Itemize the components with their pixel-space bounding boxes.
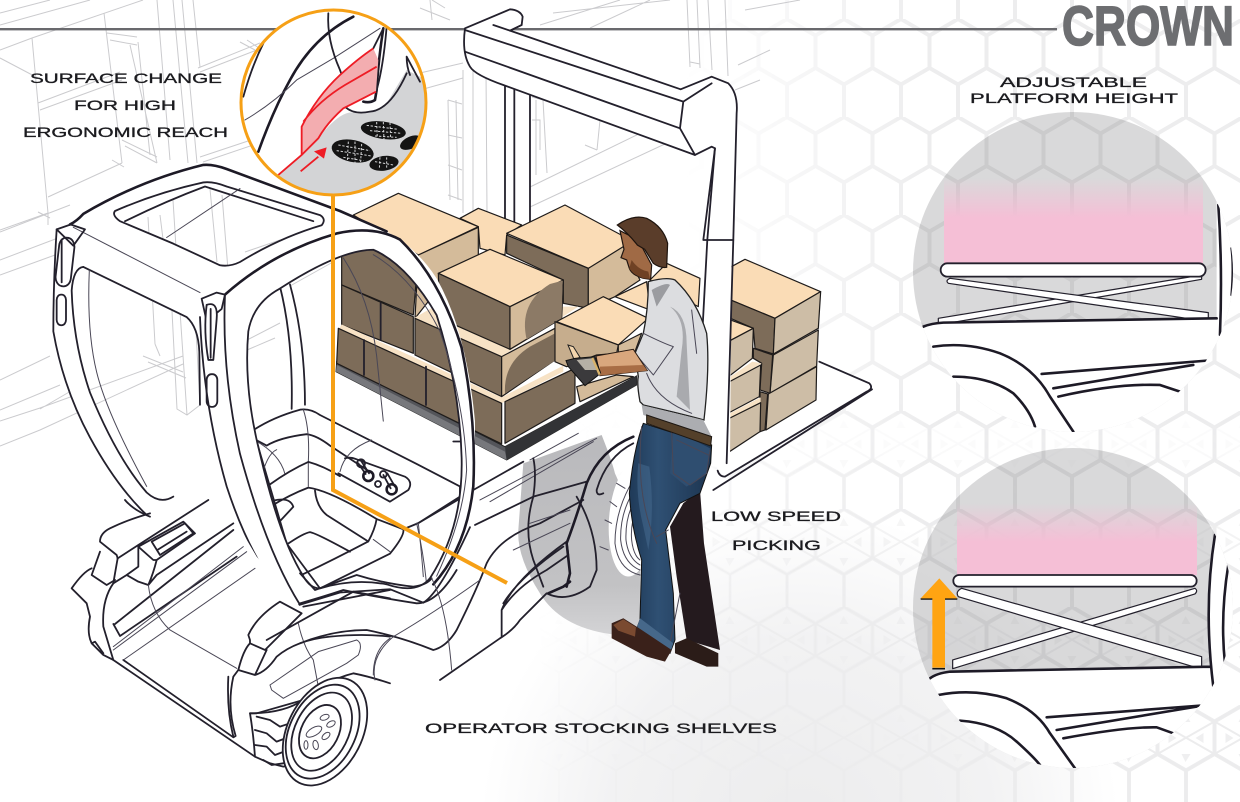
box held by operator xyxy=(555,297,648,367)
background xyxy=(553,0,1240,802)
icon: boot prints xyxy=(332,121,418,171)
warehouse racking sketch xyxy=(0,0,800,446)
front pillar and arch xyxy=(225,230,474,584)
rear body of truck xyxy=(72,500,390,800)
label: operator stocking shelves: OPERATOR STOCKING SHELVES xyxy=(425,720,777,736)
label: surface change: ERGONOMIC REACH xyxy=(23,124,228,140)
belt xyxy=(647,415,712,446)
arrow: raise xyxy=(921,578,957,669)
label: adjustable platform height xyxy=(970,74,1179,106)
white truck body xyxy=(930,536,1233,768)
mast left upright xyxy=(505,85,530,233)
orange leader line xyxy=(333,195,507,583)
head xyxy=(617,217,668,279)
box far back xyxy=(460,208,522,255)
label: low speed picking: PICKING xyxy=(732,537,821,553)
truck deck xyxy=(253,372,477,588)
grey floor with step xyxy=(279,70,424,194)
callout magnifier: surface change xyxy=(241,10,433,200)
back stack of boxes xyxy=(719,259,821,458)
roof outline xyxy=(70,165,387,231)
scissor lift xyxy=(938,275,1202,323)
platform bar xyxy=(941,263,1206,277)
seat and console xyxy=(253,284,460,588)
platform bar xyxy=(953,575,1197,587)
drive wheel behind operator xyxy=(600,462,658,578)
operator xyxy=(566,217,720,667)
scissor lift xyxy=(953,588,1197,669)
white truck body xyxy=(922,202,1232,432)
mast header and right post xyxy=(464,9,738,467)
rear pillar xyxy=(53,229,147,515)
pink operator zone xyxy=(957,510,1197,575)
box centre top xyxy=(438,249,563,349)
control panel with joysticks xyxy=(338,440,410,502)
side body and fender xyxy=(300,433,633,680)
shoes xyxy=(612,618,718,667)
label: surface change: FOR HIGH xyxy=(74,97,176,113)
label: surface change xyxy=(23,70,228,140)
red highlighted zone xyxy=(278,48,378,175)
platform diagram: raised xyxy=(913,448,1233,768)
pillar lamp right xyxy=(202,293,225,407)
label: adjustable platform height: ADJUSTABLE xyxy=(1000,74,1147,90)
front wheel xyxy=(250,664,390,800)
box large upper right xyxy=(507,205,700,310)
rear support posts xyxy=(280,284,305,409)
pillar lamp left xyxy=(55,224,85,325)
cab frame xyxy=(53,165,475,608)
platform diagram: lowered xyxy=(913,112,1233,432)
stacked boxes on the platform xyxy=(337,193,700,444)
header rule xyxy=(0,28,1057,30)
shirt xyxy=(635,279,712,437)
forearm and glove xyxy=(566,345,647,386)
pink operator zone xyxy=(944,178,1203,263)
lower layer boxes xyxy=(337,285,633,444)
pallet tray xyxy=(326,250,637,460)
label: low speed picking: LOW SPEED xyxy=(711,508,841,524)
forks platform xyxy=(713,362,872,490)
box large upper left xyxy=(342,193,478,318)
label: surface change: SURFACE CHANGE xyxy=(30,70,222,86)
shadow under truck and operator xyxy=(518,435,640,638)
rear window xyxy=(83,267,200,405)
label: adjustable platform height: PLATFORM HEIGHT xyxy=(970,90,1179,106)
trousers xyxy=(629,423,720,653)
label: low speed picking xyxy=(711,508,841,553)
